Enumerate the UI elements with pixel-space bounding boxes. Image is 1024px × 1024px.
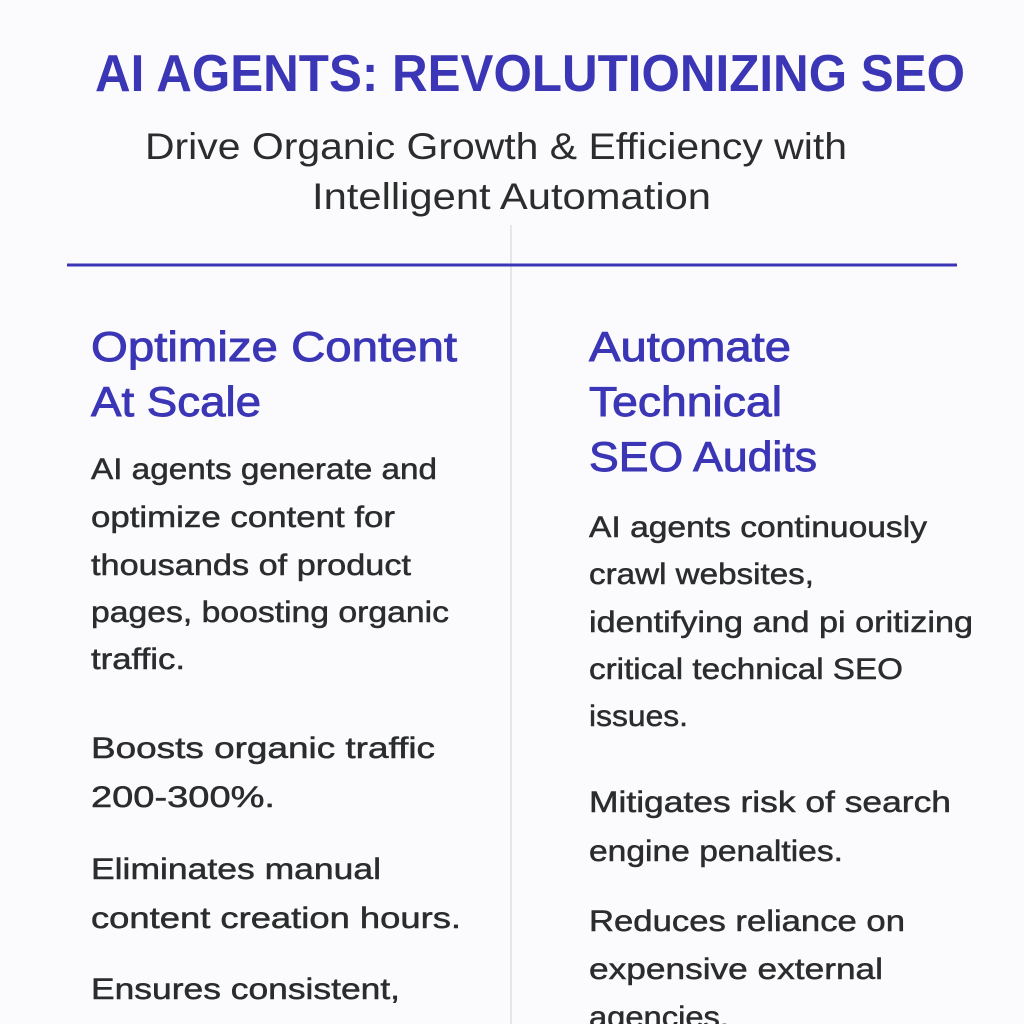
- text block: description: traffic.: [91, 643, 185, 676]
- heading: technical seo audits: Technical: [589, 378, 782, 425]
- text block: benefit 3: Ensures consistent,: [91, 973, 400, 1006]
- text block: description: thousands of product: [91, 549, 412, 582]
- text block: benefit 2: Reduces reliance on: [589, 905, 905, 938]
- subtitle: [145, 126, 847, 217]
- text block: description: [589, 511, 973, 733]
- heading: technical seo audits: [589, 323, 817, 480]
- title: AI AGENTS: REVOLUTIONIZING SEO: [95, 45, 965, 103]
- text block: description: pages, boosting organic: [91, 596, 449, 629]
- text block: benefit 2: expensive external: [589, 953, 883, 986]
- subtitle: Drive Organic Growth & Efficiency with: [145, 126, 847, 167]
- text block: description: optimize content for: [91, 501, 395, 534]
- panel: technical seo audits: [589, 323, 973, 1024]
- text block: benefit 1: engine penalties.: [589, 835, 843, 868]
- text block: benefit 1: [589, 786, 951, 868]
- text block: benefit 2: [91, 853, 461, 935]
- text block: description: AI agents continuously: [589, 511, 927, 544]
- text block: benefit 1: 200-300%.: [91, 781, 275, 814]
- text block: benefit 1: [91, 732, 435, 814]
- text block: benefit 2: Eliminates manual: [91, 853, 381, 886]
- text block: description: identifying and pi oritizing: [589, 606, 973, 639]
- text block: benefit 1: Mitigates risk of search: [589, 786, 951, 819]
- heading: optimize content: At Scale: [91, 378, 261, 425]
- text block: description: [91, 453, 449, 676]
- text block: benefit 3: [91, 973, 400, 1024]
- text block: description: critical technical SEO: [589, 653, 903, 686]
- text block: benefit 1: Boosts organic traffic: [91, 732, 435, 765]
- text block: description: issues.: [589, 700, 688, 733]
- subtitle: Intelligent Automation: [312, 176, 711, 217]
- text block: benefit 2: content creation hours.: [91, 902, 461, 935]
- heading: optimize content: Optimize Content: [91, 323, 457, 370]
- heading: technical seo audits: SEO Audits: [589, 433, 817, 480]
- text block: description: AI agents generate and: [91, 453, 437, 486]
- text block: benefit 2: [589, 905, 905, 1024]
- panel: optimize content: [91, 323, 461, 1024]
- heading: technical seo audits: Automate: [589, 323, 791, 370]
- heading: optimize content: [91, 323, 457, 425]
- text block: description: crawl websites,: [589, 558, 814, 591]
